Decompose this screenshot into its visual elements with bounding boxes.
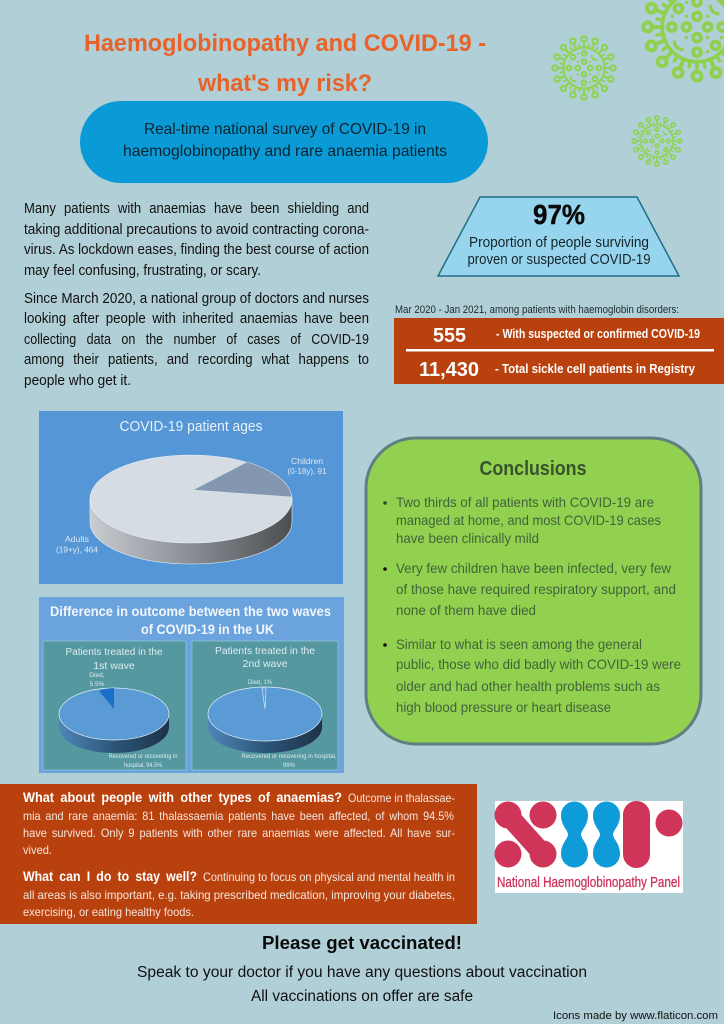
panel: conclusions	[366, 438, 701, 744]
bullet: risk factors: Similar to what is seen among the general	[396, 636, 642, 652]
bullet: risk factors: older and had other health problems such as	[396, 678, 660, 694]
panel: patient ages pie chart: (19+y), 464	[56, 544, 98, 554]
vaccination advice: Speak to your doctor if you have any questions about vaccination	[137, 964, 587, 981]
logo: National Haemoglobinopathy Panel	[494, 801, 683, 893]
icon credit: Icons made by www.flaticon.com	[553, 1010, 718, 1022]
stats caption: Mar 2020 - Jan 2021, among patients with haemoglobin disorders:	[395, 304, 679, 316]
bullet: home management: managed at home, and most COVID-19 cases	[396, 512, 661, 528]
bullet: risk factors: public, those who did badly with COVID-19 were	[396, 656, 681, 672]
pie chart: 1st wave: 5.5%	[90, 681, 105, 688]
bullet: children: none of them have died	[396, 602, 536, 618]
stats panel: 555	[433, 325, 466, 347]
text: staying well	[23, 869, 455, 919]
intro text: looking after people with inherited anaemias have been	[24, 311, 369, 327]
intro text: Since March 2020, a national group of doctors and nurses	[24, 291, 369, 307]
panel: patient ages pie chart: COVID-19 patient ages	[120, 419, 262, 435]
pie chart: 2nd wave	[192, 641, 338, 770]
icon: small virus	[632, 116, 682, 166]
text: staying well: Continuing to focus on physical and mental health in	[203, 870, 455, 884]
pie chart: 1st wave: Patients treated in the	[66, 646, 163, 658]
intro text: taking additional precautions to avoid contracting corona-	[24, 222, 369, 238]
bullet: home management: Two thirds of all patients with COVID-19 are	[396, 494, 654, 510]
callout: 97 percent: 97%	[533, 199, 585, 230]
stats panel: 11,430	[419, 359, 479, 381]
callout: 97 percent: Proportion of people surviving	[469, 235, 649, 251]
text: staying well: all areas is also important, e.g. taking prescribed medication, improving your diabetes,	[23, 888, 455, 902]
pie chart: 1st wave: hospital, 94.5%	[124, 763, 163, 769]
intro text: people who get it.	[24, 373, 131, 389]
pie chart: 2nd wave: 2nd wave	[243, 658, 288, 670]
panel: patient ages pie chart: Children	[291, 456, 323, 466]
intro text: Many patients with anaemias have been shielding and	[24, 201, 369, 217]
vaccination advice	[137, 964, 587, 1005]
panel: patient ages pie chart: Adults	[65, 534, 89, 544]
intro text: virus. As lockdown eases, finding the best course of action	[24, 242, 369, 258]
bullet: children	[383, 560, 676, 618]
callout: 97 percent: proven or suspected COVID-19	[468, 252, 650, 268]
text: other anaemias	[23, 790, 455, 857]
bullet: risk factors: high blood pressure or heart disease	[396, 699, 611, 715]
intro text: may feel confusing, frustrating, or scary.	[24, 263, 261, 279]
pie chart: 1st wave	[43, 641, 186, 770]
bullet: risk factors	[383, 636, 681, 715]
panel: two waves comparison: Difference in outcome between the two waves	[50, 603, 331, 619]
pie chart: 1st wave: 1st wave	[93, 660, 135, 672]
callout: 97 percent	[438, 197, 679, 276]
text: other anaemias: What about people with other types of anaemias?	[23, 790, 342, 805]
vaccination heading: Please get vaccinated!	[262, 933, 462, 953]
pie chart: 1st wave: Recovered or recovering in	[108, 754, 178, 760]
icon: medium virus	[552, 36, 616, 100]
bullet: children: of those have required respiratory support, and	[396, 581, 676, 597]
panel: patient ages pie chart	[39, 411, 343, 584]
text: other anaemias: vived.	[23, 843, 52, 857]
panel: other anaemias and staying well	[0, 784, 477, 924]
intro text	[24, 201, 369, 389]
pie chart: 1st wave: Died,	[89, 672, 105, 679]
stats panel: - Total sickle cell patients in Registry	[495, 362, 695, 376]
panel: two waves comparison	[39, 597, 344, 773]
stats panel	[394, 318, 724, 384]
subtitle pill: haemoglobinopathy and rare anaemia patients	[123, 143, 447, 160]
panel: patient ages pie chart: (0-18y), 91	[288, 466, 327, 476]
subtitle pill	[80, 101, 488, 183]
vaccination advice: All vaccinations on offer are safe	[251, 988, 473, 1005]
pie chart: 2nd wave: Died, 1%	[248, 679, 272, 686]
intro text: collecting data on the number of cases of COVID-19	[24, 332, 369, 348]
panel: conclusions: Conclusions	[480, 458, 586, 480]
intro text: among their patients, and recording what happens to	[24, 352, 369, 368]
text: other anaemias: have survived. Only 9 patients with other rare anaemias were affected. All have sur-	[23, 826, 455, 840]
pie chart: 2nd wave: 99%	[283, 763, 296, 769]
text: staying well: What can I do to stay well?	[23, 869, 197, 884]
bullet: children: Very few children have been infected, very few	[396, 560, 672, 576]
text: staying well: exercising, or eating healthy foods.	[23, 905, 194, 919]
icon: large virus top right	[643, 0, 724, 81]
title: what's my risk?	[197, 70, 372, 97]
text: other anaemias: mia and rare anaemia: 81 thalassaemia patients have been affected, of whom 94.5%	[23, 809, 454, 823]
title: Haemoglobinopathy and COVID-19 -	[84, 30, 486, 57]
bullet: home management	[383, 494, 661, 546]
title	[84, 30, 486, 97]
pie chart: 2nd wave: Patients treated in the	[215, 645, 315, 657]
text: other anaemias: Outcome in thalassae-	[348, 791, 455, 805]
bullet: home management: have been clinically mild	[396, 530, 539, 546]
pie chart: 2nd wave: Recovered or recovering in hospital,	[242, 754, 337, 760]
subtitle pill: Real-time national survey of COVID-19 in	[144, 121, 426, 138]
panel: two waves comparison: of COVID-19 in the UK	[141, 621, 274, 637]
